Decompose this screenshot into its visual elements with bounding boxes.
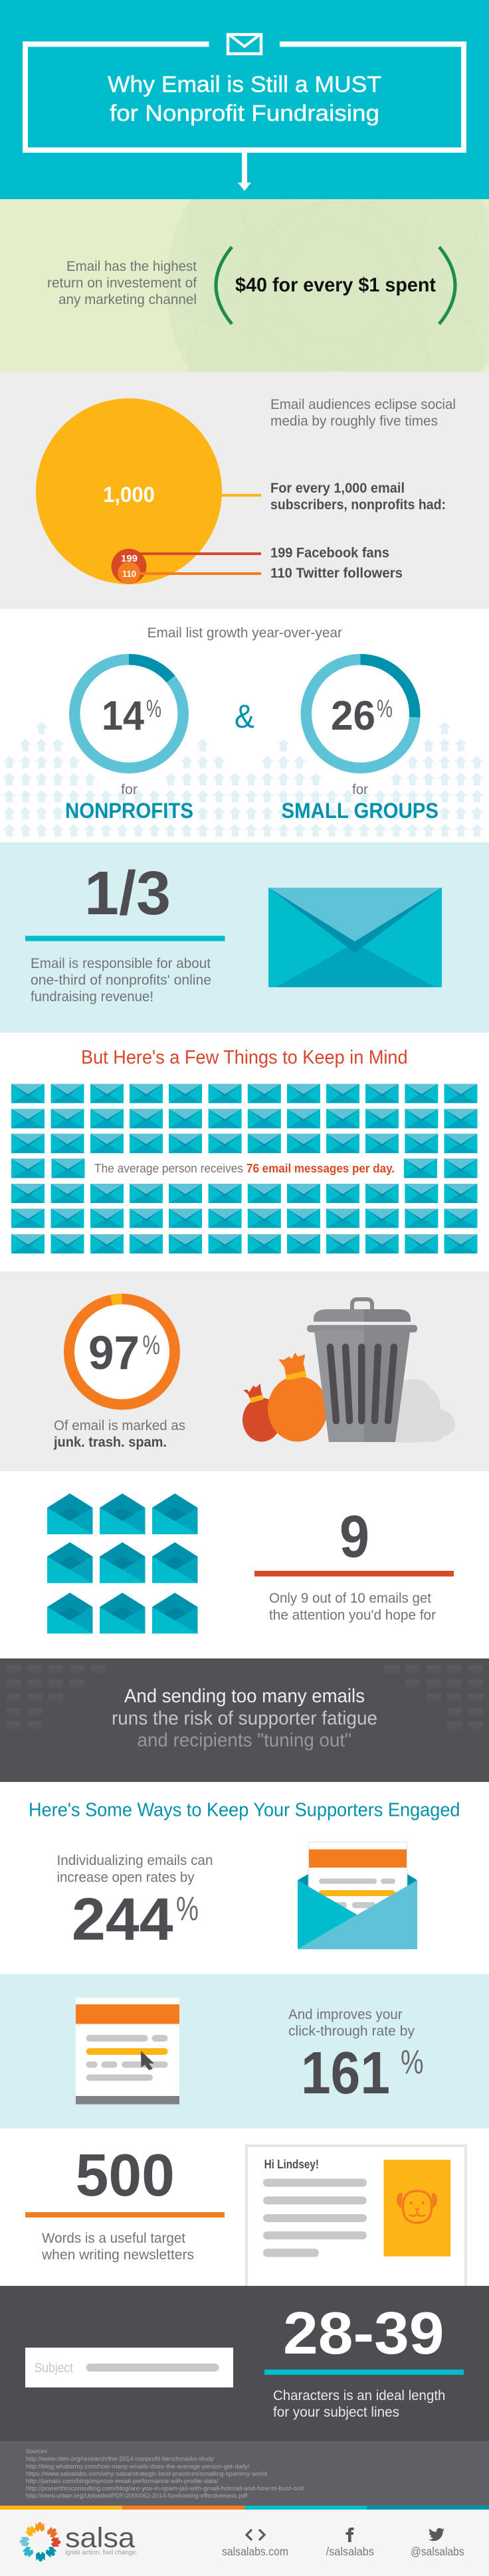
- title frame: [25, 44, 464, 150]
- panel: list growth: [0, 609, 489, 843]
- subject field: [25, 2348, 233, 2387]
- label: nonprofits: for: [121, 782, 138, 797]
- audience stat: subscribers, nonprofits had:: [270, 497, 446, 513]
- panel: individualizing emails: [0, 1782, 489, 1974]
- growth heading: Email list growth year-over-year: [147, 625, 342, 641]
- roi description: Email has the highest: [66, 259, 197, 274]
- panel: sources: http://powerthruconsulting.com/blog/are-you-in-spam-jail-with-gmail-hotmail-and-how-to-bust-out/: [26, 2485, 304, 2492]
- description: Words is a useful target: [42, 2231, 185, 2246]
- panel: junk trash spam: [0, 1271, 489, 1471]
- divider bar: [254, 1571, 454, 1576]
- description: Of email is marked as: [54, 1418, 185, 1433]
- donut: 14 percent: 14: [102, 693, 144, 739]
- divider bar: [25, 936, 225, 941]
- big number: %: [176, 1890, 199, 1927]
- panel: subject line length: [0, 2286, 489, 2441]
- panel: header: [0, 0, 489, 199]
- icon: large envelope: [268, 888, 442, 987]
- donut: 26 percent: 26: [331, 693, 375, 739]
- label: small groups: SMALL GROUPS: [282, 799, 439, 823]
- donut: 26 percent: [306, 659, 415, 768]
- panel: footer: [0, 2510, 489, 2576]
- facebook label: 199 Facebook fans: [270, 546, 389, 560]
- roi description: return on investement of: [47, 276, 197, 291]
- envelope grid: [11, 1084, 477, 1253]
- divider bar: [25, 2212, 225, 2217]
- divider bar: [264, 2370, 464, 2375]
- faded envelope pattern: [7, 1665, 483, 1731]
- label: small groups: [282, 782, 439, 823]
- right parenthesis: [439, 247, 455, 324]
- fatigue message: And sending too many emails: [124, 1686, 365, 1707]
- panel: sources: http://www.urban.org/UploadedPDF/2000062-2014-fundraising-effectiveness.pdf: [26, 2492, 247, 2500]
- label: nonprofits: NONPROFITS: [65, 799, 193, 823]
- description: click-through rate by: [288, 2024, 415, 2039]
- logo: salsa: salsa: [65, 2522, 136, 2553]
- roi figure: $40 for every $1 spent: [235, 274, 436, 296]
- icon: envelope: [228, 35, 261, 54]
- description: Characters is an ideal length: [273, 2388, 445, 2403]
- description: Email is responsible for about: [31, 956, 211, 971]
- description: one-third of nonprofits' online: [31, 973, 211, 988]
- panel: return on investment: [0, 199, 489, 372]
- website link: [222, 2530, 288, 2558]
- colour bar: [0, 2506, 489, 2510]
- heading: But Here's a Few Things to Keep in Mind: [81, 1047, 408, 1068]
- icon: open mail: [298, 1842, 417, 1949]
- description: [269, 1591, 436, 1623]
- title: [108, 72, 381, 126]
- description: [288, 2007, 415, 2039]
- big number: 1/3: [84, 858, 171, 927]
- panel: sources: http://jamain.com/blog/improve-email-performance-with-profile-data/: [26, 2478, 219, 2485]
- arrow pattern: [3, 722, 483, 837]
- donut: 97 percent: 97: [88, 1327, 140, 1380]
- arrow: [238, 153, 251, 191]
- icon: trash can: [307, 1299, 417, 1442]
- donut: 14 percent: %: [146, 695, 161, 722]
- panel: sources: https://www.salsalabs.com/why-salsa/strategic-best-practices/emailing-spammy-world: [26, 2470, 267, 2478]
- description: fundraising revenue!: [31, 989, 153, 1005]
- description: And improves your: [288, 2007, 403, 2022]
- panel: sources: http://www.nten.org/research/the-2014-nonprofit-benchmarks-study: [26, 2455, 214, 2463]
- twitter label: 110 Twitter followers: [270, 566, 403, 581]
- callout text: [94, 1162, 395, 1175]
- icon: dust cloud: [392, 1379, 455, 1443]
- big number: %: [401, 2043, 424, 2081]
- audience stat: [270, 481, 446, 513]
- donut: 14 percent: [74, 659, 183, 768]
- panel: things to keep in mind: [0, 1033, 489, 1272]
- connector line yellow: [222, 494, 261, 497]
- website link: salsalabs.com: [222, 2545, 288, 2558]
- bubble chart: 199: [121, 553, 138, 564]
- description: increase open rates by: [57, 1870, 195, 1886]
- roi description: any marketing channel: [58, 292, 197, 307]
- donut: 97 percent: %: [142, 1330, 160, 1360]
- donut: 26 percent: %: [377, 695, 393, 722]
- label: nonprofits: [65, 782, 193, 823]
- audience heading: [270, 397, 456, 429]
- description: [31, 956, 211, 1005]
- bubble chart: 110: [122, 568, 136, 579]
- big number: 244: [72, 1887, 173, 1953]
- title: for Nonprofit Fundraising: [110, 101, 379, 126]
- callout text: The average person receives: [94, 1162, 243, 1175]
- roi description: [47, 259, 197, 307]
- panel: one third of revenue: [0, 843, 489, 1033]
- big number: 28-39: [283, 2300, 444, 2367]
- icon: small bag: [243, 1384, 281, 1442]
- panel: sources: Sources:: [26, 2448, 49, 2455]
- left parenthesis: [216, 247, 232, 324]
- fatigue message: and recipients "tuning out": [137, 1730, 351, 1751]
- icon grid: open envelopes: [47, 1494, 198, 1633]
- ampersand: &: [235, 698, 254, 735]
- big number: 9: [340, 1504, 369, 1570]
- big number: 161: [301, 2040, 390, 2107]
- bubble chart: 1,000: [103, 483, 155, 507]
- icon: email card with cursor: [76, 1998, 179, 2105]
- donut: 97 percent: [69, 1299, 175, 1405]
- audience heading: media by roughly five times: [270, 414, 438, 429]
- panel: click through: [0, 1974, 489, 2129]
- description: the attention you'd hope for: [269, 1608, 436, 1623]
- connector lines: [138, 552, 261, 575]
- panel: sources: http://blog.whatarmy.com/how-many-emails-does-the-average-person-get-daily/: [26, 2463, 250, 2470]
- fatigue message: runs the risk of supporter fatigue: [112, 1708, 377, 1729]
- panel: supporter fatigue: [0, 1658, 489, 1782]
- heading: Here's Some Ways to Keep Your Supporters Engaged: [29, 1799, 460, 1820]
- description: [57, 1853, 213, 1886]
- logo: salsa: ignite action. fuel change.: [65, 2549, 138, 2557]
- newsletter card: Hi Lindsey!: [264, 2158, 319, 2171]
- twitter link: [411, 2528, 464, 2558]
- description: when writing newsletters: [41, 2247, 194, 2263]
- facebook link: [326, 2528, 374, 2558]
- panel: newsletter length: [0, 2129, 489, 2286]
- newsletter card: [246, 2146, 466, 2286]
- guilloche pattern: [166, 199, 489, 372]
- bubble chart: [36, 398, 222, 584]
- facebook link: /salsalabs: [326, 2545, 374, 2558]
- label: small groups: for: [352, 782, 368, 797]
- description: junk. trash. spam.: [53, 1435, 167, 1450]
- audience heading: Email audiences eclipse social: [270, 397, 456, 412]
- twitter link: @salsalabs: [411, 2545, 464, 2558]
- panel: sources: [0, 2441, 489, 2506]
- subject field: Subject: [35, 2361, 73, 2375]
- description: for your subject lines: [273, 2405, 399, 2420]
- fatigue message: [112, 1686, 377, 1751]
- description: [41, 2231, 194, 2263]
- description: [273, 2388, 445, 2420]
- big number: 500: [76, 2142, 175, 2209]
- callout text: 76 email messages per day.: [246, 1162, 395, 1175]
- audience stat: For every 1,000 email: [270, 481, 405, 496]
- icon: large bag: [268, 1352, 328, 1442]
- panel: nine of ten emails: [0, 1471, 489, 1658]
- panel: audience comparison: [0, 372, 489, 609]
- description: [53, 1418, 185, 1450]
- logo: salsa: [20, 2522, 138, 2561]
- description: Only 9 out of 10 emails get: [269, 1591, 431, 1606]
- title: Why Email is Still a MUST: [108, 72, 381, 97]
- icon: dog: [397, 2191, 437, 2223]
- description: Individualizing emails can: [57, 1853, 213, 1868]
